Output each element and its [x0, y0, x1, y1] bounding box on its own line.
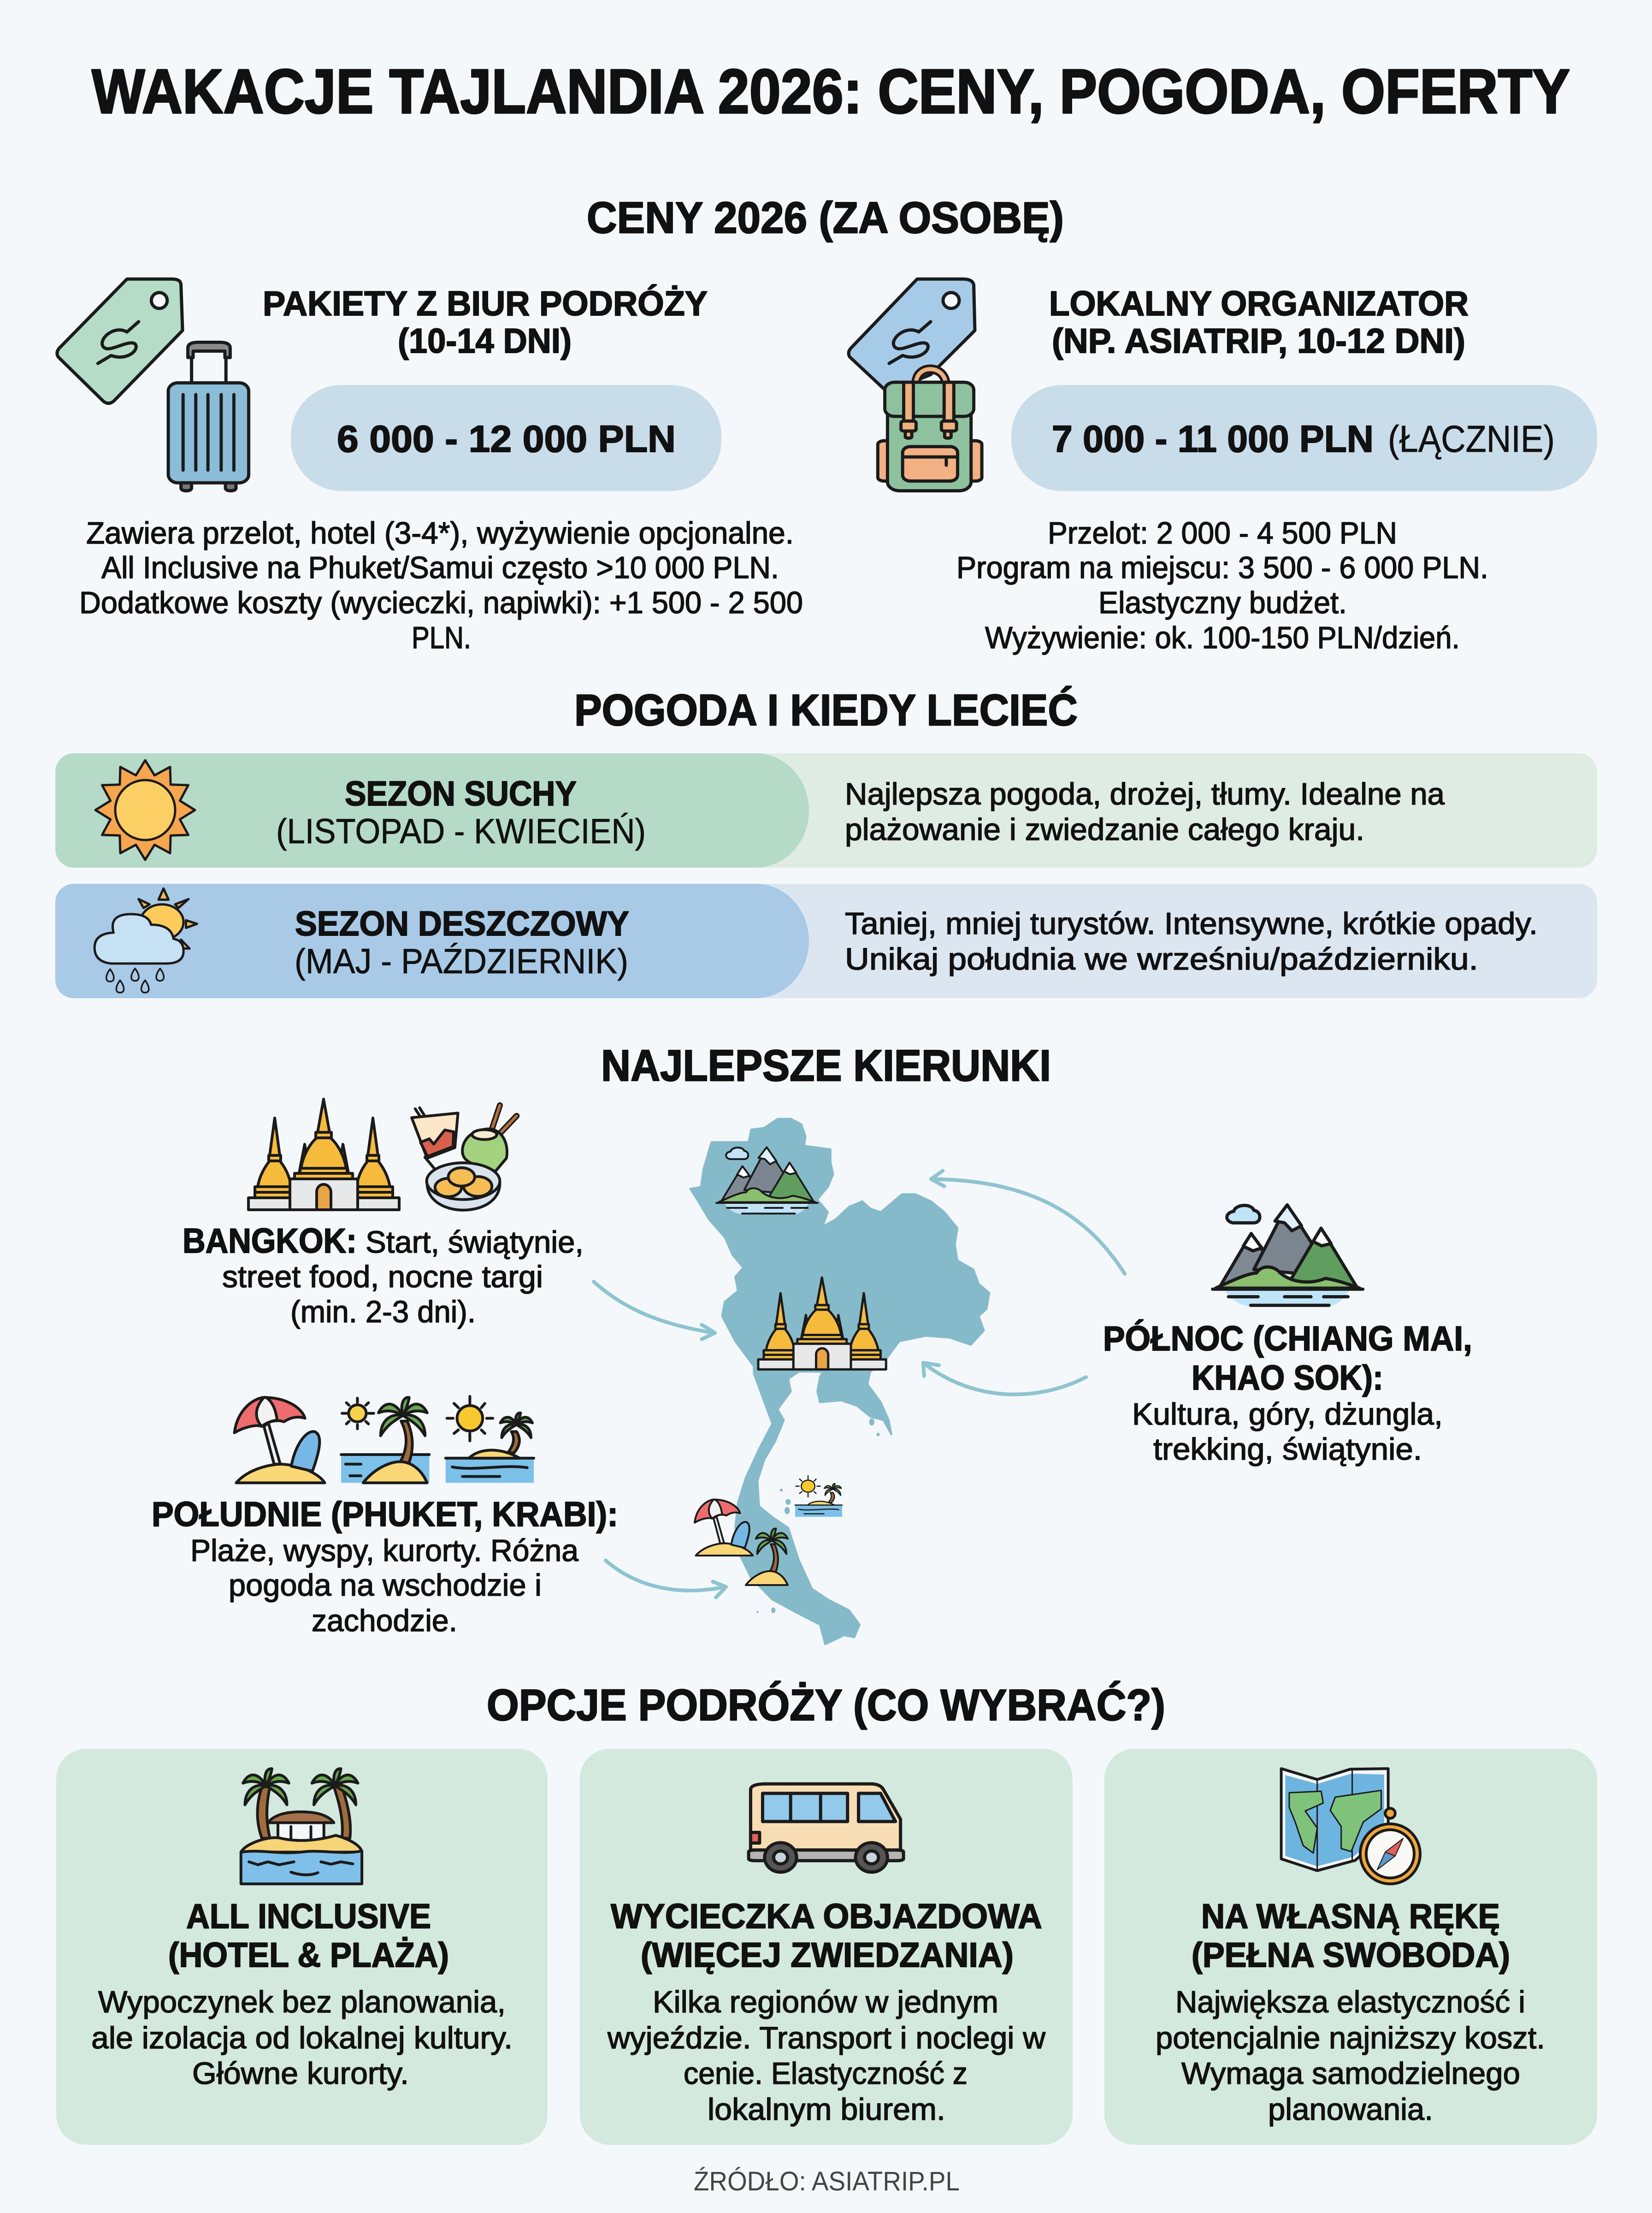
- text: (WIĘCEJ ZWIEDZANIA): [641, 1935, 1014, 1974]
- icon: palm by the sea: [341, 1397, 429, 1483]
- panel: all inclusive: [56, 1749, 548, 2145]
- arrow: północ to map middle: [923, 1363, 1086, 1395]
- text: (HOTEL & PLAŻA): [168, 1935, 449, 1974]
- text: Kilka regionów w jednym: [653, 1985, 998, 2019]
- arrow: bangkok to map: [594, 1282, 715, 1339]
- panel: sezon deszczowy: [55, 884, 1597, 998]
- icon: van: [749, 1784, 903, 1872]
- description: [79, 516, 803, 655]
- text: (min. 2-3 dni).: [290, 1295, 476, 1329]
- source: ŹRÓDŁO: ASIATRIP.PL: [694, 2166, 960, 2196]
- label: SEZON SUCHY: [345, 774, 577, 813]
- text: Główne kurorty.: [192, 2056, 409, 2091]
- price pill: [1011, 385, 1597, 491]
- panel: pakiety z biur podróży: [57, 279, 803, 655]
- text: [152, 1495, 618, 1638]
- description: Przelot: 2 000 - 4 500 PLN: [1048, 516, 1397, 550]
- text: Kultura, góry, dżungla,: [1132, 1397, 1443, 1432]
- text: NA WŁASNĄ RĘKĘ: [1201, 1897, 1500, 1935]
- heading: opcje: OPCJE PODRÓŻY (CO WYBRAĆ?): [487, 1680, 1165, 1730]
- text: [1103, 1319, 1472, 1467]
- icon: island and sun: [446, 1396, 534, 1483]
- text: WYCIECZKA OBJAZDOWA: [611, 1897, 1042, 1935]
- price pill: 6 000 - 12 000 PLN: [337, 418, 676, 460]
- description: PLN.: [412, 621, 471, 655]
- label: (LISTOPAD - KWIECIEŃ): [276, 812, 646, 851]
- description: Program na miejscu: 3 500 - 6 000 PLN.: [956, 550, 1488, 585]
- map: Thailand: [690, 1119, 989, 1645]
- icon: temple: [248, 1099, 399, 1210]
- text: potencjalnie najniższy koszt.: [1156, 2021, 1545, 2055]
- description: Dodatkowe koszty (wycieczki, napiwki): +1 500 - 2 500: [79, 586, 803, 620]
- panel: bangkok: [183, 1099, 584, 1329]
- text: cenie. Elastyczność z: [684, 2056, 968, 2091]
- description: [845, 906, 1538, 976]
- description: Najlepsza pogoda, drożej, tłumy. Idealne na: [845, 777, 1445, 811]
- subheading: [263, 284, 708, 360]
- description: plażowanie i zwiedzanie całego kraju.: [845, 812, 1364, 847]
- icon: mountains: [1213, 1205, 1363, 1307]
- icon: suitcase: [168, 342, 249, 491]
- text: POŁUDNIE (PHUKET, KRABI):: [152, 1495, 618, 1533]
- description: [845, 777, 1445, 847]
- panel: północ: [1103, 1205, 1472, 1467]
- text: street food, nocne targi: [222, 1260, 543, 1294]
- text: PÓŁNOC (CHIANG MAI,: [1103, 1319, 1472, 1358]
- text: trekking, świątynie.: [1153, 1432, 1422, 1467]
- description: Unikaj południa we wrześniu/październiku.: [845, 942, 1478, 976]
- icon: blue price tag: [849, 279, 975, 392]
- text: ale izolacja od lokalnej kultury.: [91, 2021, 513, 2055]
- subheading: LOKALNY ORGANIZATOR: [1049, 284, 1469, 323]
- subheading: PAKIETY Z BIUR PODRÓŻY: [263, 284, 708, 323]
- icon: rain cloud with sun: [94, 888, 197, 993]
- icon: umbrella and surfboard: [235, 1397, 325, 1483]
- text: lokalnym biurem.: [708, 2092, 945, 2127]
- panel: sezon suchy: [55, 753, 1597, 868]
- icon: map beach umbrella: [695, 1499, 753, 1556]
- price pill: 7 000 - 11 000 PLN: [1052, 418, 1374, 460]
- subheading: [1049, 284, 1469, 360]
- icon: backpack: [878, 369, 982, 491]
- text: KHAO SOK):: [1192, 1358, 1383, 1397]
- label: SEZON DESZCZOWY: [295, 904, 629, 943]
- text: Plaże, wyspy, kurorty. Różna: [190, 1533, 579, 1568]
- text: wyjeździe. Transport i noclegi w: [607, 2021, 1046, 2055]
- text: planowania.: [1268, 2092, 1433, 2127]
- panel: wycieczka objazdowa: [580, 1749, 1073, 2145]
- icon: green price tag: [57, 279, 183, 403]
- description: Taniej, mniej turystów. Intensywne, krótkie opady.: [845, 906, 1538, 941]
- subheading: (NP. ASIATRIP, 10-12 DNI): [1052, 321, 1465, 360]
- label: (MAJ - PAŹDZIERNIK): [295, 942, 628, 981]
- panel: lokalny organizator: [849, 279, 1597, 655]
- text: Wymaga samodzielnego: [1181, 2056, 1520, 2091]
- arrow: południe to map: [606, 1561, 726, 1598]
- description: Zawiera przelot, hotel (3-4*), wyżywienie opcjonalne.: [86, 516, 794, 550]
- text: [91, 1897, 513, 2091]
- text: [1156, 1897, 1545, 2127]
- heading: ceny: CENY 2026 (ZA OSOBĘ): [587, 193, 1064, 243]
- price pill: [291, 385, 721, 491]
- icon: map and compass: [1281, 1769, 1420, 1884]
- label: [295, 904, 629, 981]
- icon: map sun island: [795, 1476, 842, 1517]
- text: Największa elastyczność i: [1175, 1985, 1525, 2019]
- panel: południe: [152, 1396, 618, 1638]
- panel: na własną rękę: [1104, 1749, 1597, 2145]
- text: zachodzie.: [312, 1604, 457, 1638]
- heading: pogoda: POGODA I KIEDY LECIEĆ: [574, 686, 1078, 735]
- text: Start, świątynie,: [366, 1225, 584, 1260]
- icon: map temple: [758, 1278, 886, 1369]
- text: [607, 1897, 1046, 2127]
- price pill: (ŁĄCZNIE): [1388, 418, 1555, 460]
- description: Wyżywienie: ok. 100-150 PLN/dzień.: [985, 621, 1460, 655]
- icon: island resort: [241, 1769, 362, 1884]
- subheading: (10-14 DNI): [398, 321, 572, 360]
- description: All Inclusive na Phuket/Samui często >10 000 PLN.: [101, 550, 779, 585]
- description: Elastyczny budżet.: [1098, 586, 1347, 620]
- text: pogoda na wschodzie i: [229, 1568, 542, 1603]
- heading: kierunki: NAJLEPSZE KIERUNKI: [601, 1041, 1051, 1090]
- icon: map palm island: [746, 1528, 788, 1585]
- label: [276, 774, 646, 851]
- icon: street food: [412, 1105, 517, 1210]
- text: Wypoczynek bez planowania,: [98, 1985, 506, 2019]
- description: [956, 516, 1488, 655]
- arrow: północ to map top: [931, 1171, 1125, 1274]
- icon: sun: [95, 760, 195, 860]
- text: BANGKOK:: [183, 1221, 357, 1260]
- icon: map mountains: [716, 1147, 818, 1214]
- text: ALL INCLUSIVE: [186, 1897, 431, 1935]
- text: [183, 1221, 584, 1329]
- text: (PEŁNA SWOBODA): [1192, 1935, 1510, 1974]
